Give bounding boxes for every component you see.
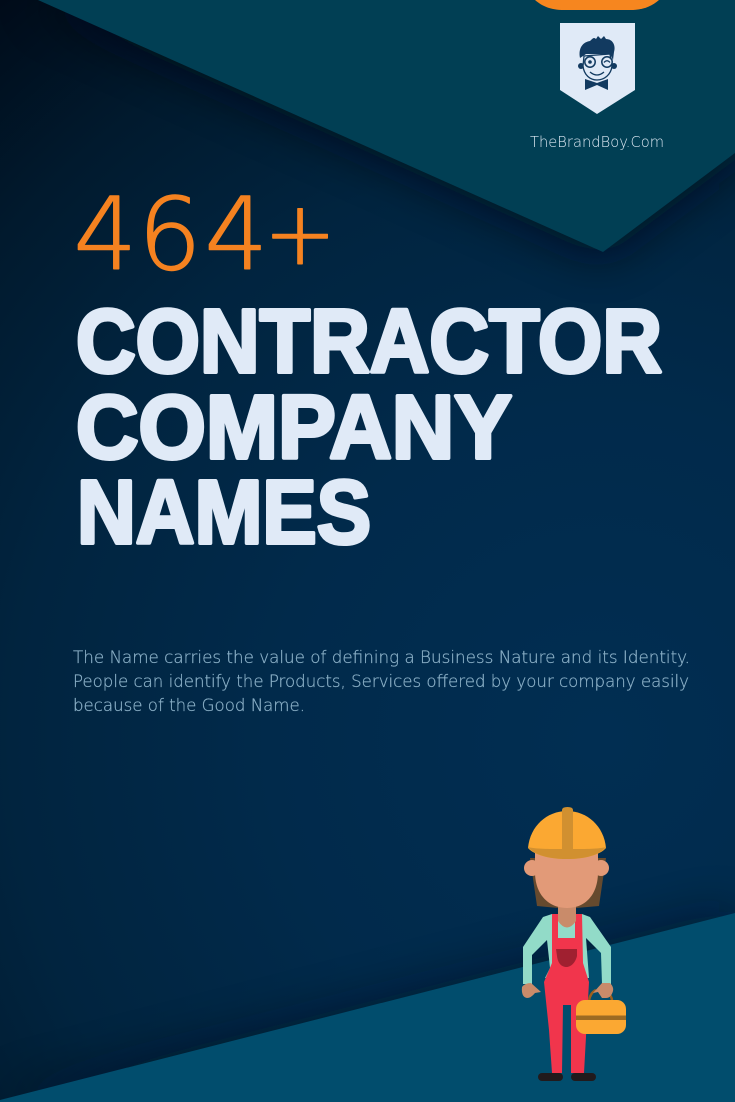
hands xyxy=(522,983,541,998)
title line 1: CONTRACTOR xyxy=(76,292,662,392)
logo badge xyxy=(560,23,635,114)
title line 3: NAMES xyxy=(77,463,371,563)
shirt and arms xyxy=(523,914,611,984)
title line 2: COMPANY xyxy=(76,378,512,478)
heading number: 4 xyxy=(74,176,137,293)
neck xyxy=(558,900,576,927)
title xyxy=(76,292,662,563)
shadow of bottom panel xyxy=(0,908,735,1102)
hat brim and ridge xyxy=(528,807,606,859)
worker character xyxy=(522,807,626,1081)
description text: The Name carries the value of defining a Business Nature and its Identity. xyxy=(73,648,690,668)
icon: boy mascot xyxy=(578,36,617,90)
overalls xyxy=(544,914,589,1073)
face xyxy=(535,850,598,908)
badge shield xyxy=(560,23,635,114)
shadow of top panel xyxy=(30,0,735,258)
description text: People can identify the Products, Services offered by your company easily xyxy=(73,672,689,692)
panel: bottom teal band xyxy=(0,913,735,1102)
toolbox xyxy=(576,990,626,1034)
ears xyxy=(524,860,540,876)
shirt collar xyxy=(558,914,575,938)
heading number: + xyxy=(264,182,337,284)
heading number: 6 xyxy=(138,176,202,293)
brand name: TheBrandBoy.Com xyxy=(530,133,664,151)
neck front xyxy=(558,908,576,928)
boots xyxy=(538,1073,563,1081)
hard hat xyxy=(528,811,606,859)
orange button at top xyxy=(535,0,659,10)
overalls pocket xyxy=(556,949,577,967)
description text xyxy=(73,648,690,716)
panel: top teal banner xyxy=(38,0,735,252)
hair xyxy=(530,858,606,908)
description text: because of the Good Name. xyxy=(73,696,305,716)
heading number: 4 xyxy=(204,176,268,293)
